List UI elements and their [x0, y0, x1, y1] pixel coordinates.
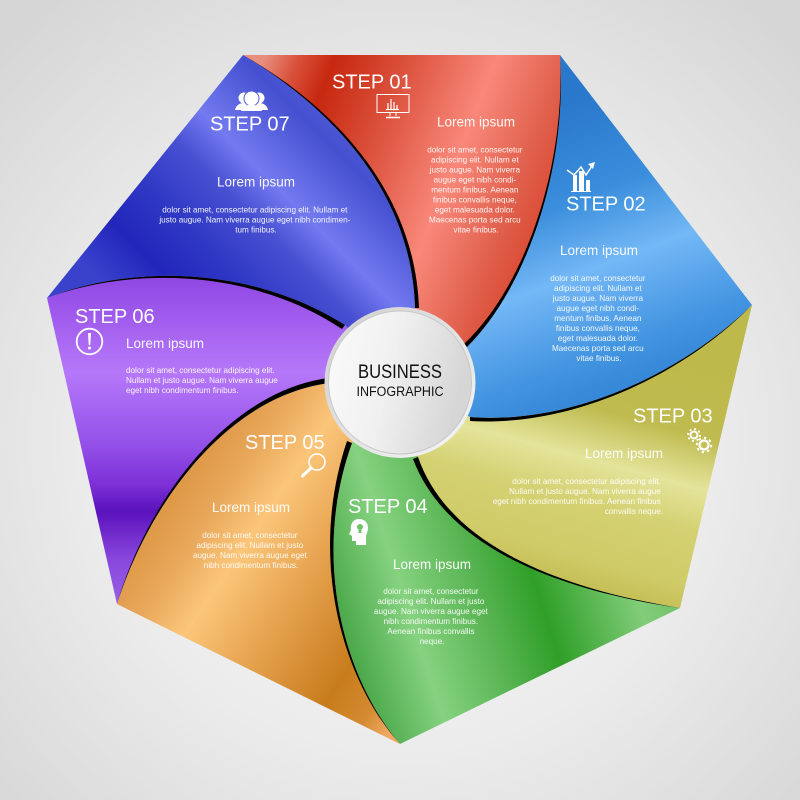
- body text: finibus convallis neque,: [556, 324, 640, 333]
- badge subtitle: INFOGRAPHIC: [356, 384, 444, 399]
- icon: people: [235, 91, 268, 111]
- heading: step 01: STEP 01: [332, 72, 412, 94]
- body text: dolor sit amet, consectetur adipiscing elit.: [126, 366, 275, 375]
- body text: tum finibus.: [235, 226, 277, 234]
- body text: adipiscing elit. Nullam et justo: [377, 597, 485, 606]
- panel: step 02: [400, 55, 752, 418]
- body text: mentum finibus. Aenean: [431, 186, 518, 194]
- body text: dolor sit amet, consectetur adipiscing elit. Nullam et: [162, 206, 348, 214]
- panel: step 04: [333, 383, 680, 744]
- body text: Maecenas porta sed arcu: [552, 344, 644, 353]
- panel: step 07: [47, 55, 415, 383]
- segment: blue: [400, 55, 752, 418]
- heading: step 04: STEP 04: [348, 496, 428, 518]
- body text: nibh condimentum finibus.: [204, 561, 298, 570]
- subheading: Lorem ipsum: [585, 446, 663, 461]
- body text: dolor sit amet, consectetur: [550, 274, 646, 283]
- body text: adipiscing elit. Nullam et justo: [196, 541, 304, 550]
- panel: step 05: [117, 383, 400, 744]
- body text: vitae finibus.: [453, 226, 499, 234]
- heading: step 06: STEP 06: [75, 306, 155, 328]
- heading: step 07: STEP 07: [210, 114, 290, 136]
- subheading: Lorem ipsum: [393, 557, 471, 572]
- body text: Nullam et justo augue. Nam viverra augue: [509, 487, 661, 496]
- subheading: Lorem ipsum: [126, 336, 204, 351]
- body text: convallis neque.: [605, 507, 663, 516]
- subheading: Lorem ipsum: [437, 114, 515, 130]
- body text: justo augue. Nam viverra: [429, 166, 521, 174]
- icon: growth chart: [567, 162, 595, 192]
- body text: Aenean finibus convallis: [387, 627, 474, 636]
- body text: adipiscing elit. Nullam et: [554, 284, 642, 293]
- body text: neque.: [420, 637, 444, 646]
- panel: step 03: [400, 305, 752, 608]
- body text: eget nibh condimentum finibus.: [126, 386, 238, 395]
- center badge: [324, 307, 476, 458]
- subheading: Lorem ipsum: [212, 500, 290, 515]
- icon: monitor chart: [377, 94, 409, 118]
- body text: Maecenas porta sed arcu: [429, 216, 521, 224]
- segment: indigo: [47, 55, 415, 383]
- body text: eget nibh condimentum finibus. Aenean finibus: [493, 497, 661, 506]
- body text: dolor sit amet, consectetur: [427, 146, 523, 154]
- body text: augue eget nibh condi-: [557, 304, 639, 313]
- body text: dolor sit amet, consectetur: [383, 587, 479, 596]
- subheading: Lorem ipsum: [560, 243, 638, 258]
- heading: step 05: STEP 05: [245, 432, 325, 454]
- segment: green: [333, 383, 680, 744]
- icon: head with bulb: [349, 519, 368, 545]
- icon: exclamation: [77, 329, 102, 354]
- black swirl dividers: [47, 55, 752, 744]
- body text: augue eget nibh condi-: [434, 176, 516, 184]
- body text: dolor sit amet, consectetur adipiscing elit.: [512, 477, 661, 486]
- body text: eget malesuada dolor.: [435, 206, 515, 214]
- heading: step 03: STEP 03: [633, 406, 713, 428]
- badge title: BUSINESS: [358, 362, 442, 383]
- body text: finibus convallis neque,: [433, 196, 517, 204]
- panel: step 01: [243, 55, 561, 383]
- subheading: Lorem ipsum: [217, 174, 295, 190]
- panel: step 06: [47, 276, 400, 604]
- body text: augue. Nam viverra augue eget: [374, 607, 489, 616]
- segment: yellow: [400, 305, 752, 608]
- body text: adipiscing elit. Nullam et: [431, 156, 519, 164]
- body text: vitae finibus.: [576, 354, 622, 363]
- segment: red: [243, 55, 561, 383]
- body text: justo augue. Nam viverra augue eget nibh condimen-: [158, 216, 351, 224]
- body text: dolor sit amet, consectetur: [202, 531, 298, 540]
- body text: eget malesuada dolor.: [558, 334, 638, 343]
- body text: Nullam et justo augue. Nam viverra augue: [126, 376, 278, 385]
- icon: magnifier: [302, 454, 325, 476]
- body text: justo augue. Nam viverra: [552, 294, 644, 303]
- body text: augue. Nam viverra augue eget: [193, 551, 308, 560]
- segment: purple: [47, 276, 400, 604]
- heading: step 02: STEP 02: [566, 194, 646, 216]
- body text: nibh condimentum finibus.: [384, 617, 478, 626]
- icon: gears: [688, 429, 711, 452]
- body text: mentum finibus. Aenean: [554, 314, 641, 323]
- segment: orange: [117, 383, 400, 744]
